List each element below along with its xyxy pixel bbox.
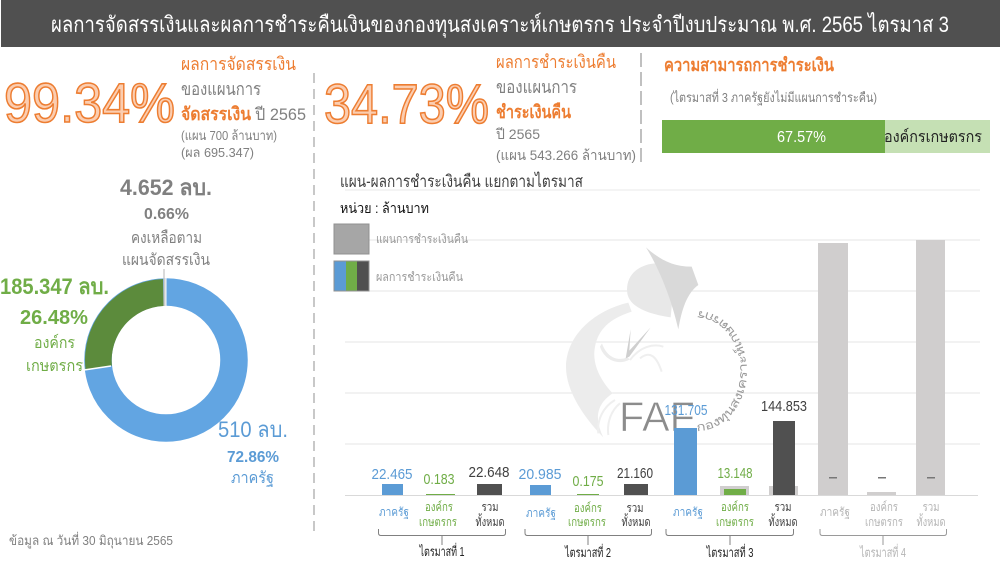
quarter 1: ภาครัฐ [379,505,409,519]
donut label: public sector: 510 ลบ. [218,417,288,442]
watermark logo: กองทุนสงเคราะห์เกษตรกร [697,311,747,432]
quarter 4: ภาครัฐ [820,505,850,519]
quarter 3: รวม [774,500,792,514]
panel: repayment capacity [662,55,990,153]
chart heading: แผน-ผลการชำระเงินคืน แยกตามไตรมาส [340,171,583,191]
quarter 2: 21.160 [617,465,653,482]
donut label: farmer organisations: เกษตรกร [26,358,83,375]
quarter 2 [518,465,653,560]
quarter 1: เกษตรกร [419,515,457,529]
quarter 3: เกษตรกร [716,515,754,529]
quarter 3 [664,398,807,560]
progress bar [662,120,990,153]
donut label: remaining: 0.66% [144,206,189,223]
donut label: farmer organisations: องค์กร [34,333,75,352]
panel: allocation result [4,54,306,160]
repayment description [496,52,636,163]
quarter 2: ภาครัฐ [526,506,556,520]
allocation description: ผลการจัดสรรเงิน [181,54,296,74]
quarter 4: ทั้งหมด [916,513,946,529]
quarter 4: ไตรมาสที่ 4 [859,544,906,560]
donut label: remaining: แผนจัดสรรเงิน [122,252,210,269]
allocation description: (ผล 695.347) [181,145,254,160]
title bar [1,0,1000,47]
big number: 99.34%: 99.34% [4,71,175,134]
quarter 4 [818,240,946,560]
allocation description: ของแผนการ [181,79,261,99]
repayment description: ปี 2565 [496,126,540,142]
donut label: remaining [120,175,212,269]
quarter 1: 0.183 [424,471,454,488]
quarter 3: ไตรมาสที่ 3 [706,544,754,560]
repayment description: ผลการชำระเงินคืน [496,52,616,72]
watermark logo: FAF [619,393,695,440]
quarter 3: 144.853 [761,398,807,415]
quarter 3: ทั้งหมด [768,513,798,529]
panel: repayment capacity: ความสามารถการชำระเงิน [664,55,835,75]
quarter 1: องค์กร [425,500,453,514]
allocation description: จัดสรรเงิน [181,104,252,124]
unit label: หน่วย : ล้านบาท [340,200,429,216]
quarter 1: 22.648 [468,464,510,481]
legend: แผนการชำระเงินคืน [376,232,468,246]
quarter 1 [372,464,510,559]
bar chart [345,240,978,560]
allocation description: ปี 2565 [254,105,306,124]
quarter 2: ทั้งหมด [622,513,650,529]
quarter 1: ทั้งหมด [476,513,504,529]
donut label: public sector: 72.86% [227,449,279,466]
panel: repayment result [324,52,636,163]
quarter 3: องค์กร [721,500,749,514]
watermark logo [566,248,747,440]
donut label: farmer organisations: 26.48% [20,307,88,329]
quarter 4: องค์กร [870,500,898,514]
quarter 4: เกษตรกร [865,515,903,529]
allocation description [181,54,306,160]
quarter 1: 22.465 [372,466,412,483]
legend [334,224,468,291]
donut chart [84,269,234,428]
progress bar: องค์กรเกษตรกร [884,127,982,146]
quarter 2: 0.175 [572,473,604,490]
donut label: farmer organisations [0,274,109,375]
data date note: ข้อมูล ณ วันที่ 30 มิถุนายน 2565 [9,532,173,549]
progress bar: 67.57% [777,129,826,146]
quarter 4: รวม [922,500,940,514]
quarter 3: ภาครัฐ [673,505,703,519]
quarter 3: 131.705 [664,402,708,419]
divider right [640,53,642,167]
repayment description: ชำระเงินคืน [496,102,572,122]
big number: 34.73%: 34.73% [324,72,489,135]
quarter 2: เกษตรกร [568,515,606,529]
quarter 2: องค์กร [574,501,602,515]
quarter 2: รวม [626,501,644,515]
quarter 2: ไตรมาสที่ 2 [564,544,611,560]
repayment description: (แผน 543.266 ล้านบาท) [496,147,636,163]
donut label: public sector [218,417,288,487]
donut label: remaining: คงเหลือตาม [131,229,202,247]
donut label: farmer organisations: 185.347 ลบ. [0,274,109,299]
legend: ผลการชำระเงินคืน [376,270,463,284]
repayment description: ของแผนการ [496,77,577,97]
quarter 1: รวม [482,500,498,514]
quarter 1: ไตรมาสที่ 1 [419,543,464,559]
quarter 3: 13.148 [718,465,752,482]
quarter 2: 20.985 [518,466,562,483]
donut label: public sector: ภาครัฐ [231,470,274,487]
divider left [313,73,315,533]
allocation description: (แผน 700 ล้านบาท) [181,128,277,143]
donut label: remaining: 4.652 ลบ. [120,175,212,200]
panel: repayment capacity: (ไตรมาสที่ 3 ภาครัฐยังไม่มีแผนการชำระคืน) [670,89,877,106]
